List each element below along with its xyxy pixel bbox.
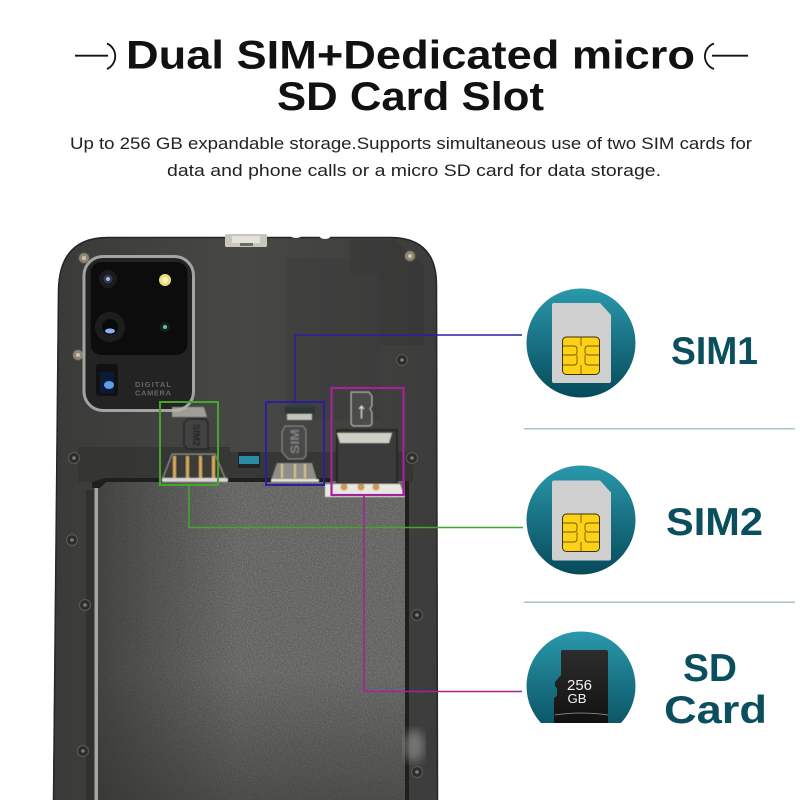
top edge notches	[290, 231, 331, 239]
title ornament: left	[75, 44, 115, 69]
label: sd card: Card	[664, 689, 767, 732]
label: sd card	[664, 647, 767, 732]
antenna sticker	[350, 240, 424, 345]
camera main lens block	[90, 262, 188, 355]
left rail shade	[86, 490, 95, 800]
title: SD Card Slot	[277, 75, 544, 119]
shadow band above battery	[78, 447, 413, 482]
sim1 slot	[271, 407, 319, 482]
divider one	[524, 428, 795, 430]
title: Dual SIM+Dedicated micro	[126, 34, 695, 78]
sim2 slot	[162, 407, 228, 482]
lens 2	[95, 312, 125, 342]
connector: sim2 green	[160, 402, 523, 528]
description text: data and phone calls or a micro SD card for data storage.	[167, 162, 661, 180]
icon: sd card: GB	[568, 692, 586, 706]
icon: sd card	[526, 632, 636, 723]
phone frame	[53, 237, 438, 800]
sim2 slot: SIM2	[190, 424, 201, 446]
screws	[66, 250, 422, 778]
sensor	[160, 322, 170, 332]
title	[126, 34, 695, 119]
frame outer dark edge	[54, 238, 438, 800]
battery top edge	[92, 478, 409, 800]
sd slot: ↑	[356, 398, 367, 423]
status led block	[238, 452, 260, 468]
camera label	[135, 380, 172, 398]
camera label: CAMERA	[135, 388, 172, 398]
smudge	[404, 730, 424, 762]
title ornament: right	[705, 44, 748, 69]
icon: sim2	[526, 466, 636, 574]
phone back	[53, 231, 438, 800]
camera housing	[84, 256, 194, 410]
icon: sd card: 256	[567, 678, 592, 694]
periscope lens	[96, 364, 118, 396]
label: sim2: SIM2	[666, 501, 763, 544]
label: sim1: SIM1	[671, 330, 758, 373]
divider two	[524, 602, 795, 603]
battery left silver strip	[94, 488, 98, 800]
flash	[159, 274, 171, 286]
camera label: DIGITAL	[135, 380, 171, 389]
upper interior panel	[287, 258, 380, 420]
description text	[70, 135, 753, 180]
icon: sim1	[526, 288, 636, 398]
camera module	[84, 256, 194, 410]
connector: sd magenta	[332, 388, 522, 692]
description text: Up to 256 GB expandable storage.Supports simultaneous use of two SIM cards for	[70, 135, 753, 153]
usb connector	[225, 234, 267, 247]
battery panel	[98, 481, 408, 800]
connector: sim1 blue	[266, 335, 522, 485]
sd slot	[325, 392, 405, 497]
lens 1	[99, 270, 117, 288]
label: sd card: SD	[683, 647, 737, 690]
sim1 slot: SIM	[288, 429, 302, 454]
